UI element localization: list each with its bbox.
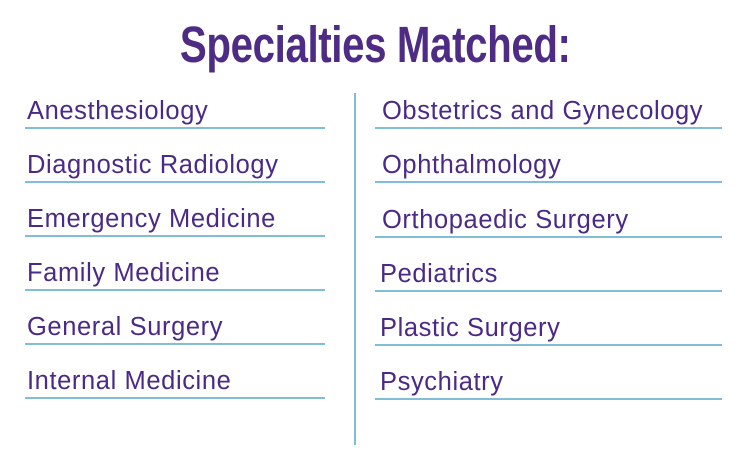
item: Psychiatry xyxy=(375,398,722,400)
panel: right column: Psychiatry xyxy=(380,368,504,396)
item: Pediatrics xyxy=(375,290,722,292)
panel: left column: Family Medicine xyxy=(27,259,220,287)
item: Family Medicine xyxy=(25,289,325,291)
panel: right column: Ophthalmology xyxy=(382,151,561,179)
panel: left column: Emergency Medicine xyxy=(27,205,276,233)
item: Obstetrics and Gynecology xyxy=(375,127,722,129)
column divider xyxy=(354,93,356,445)
panel: right column: Orthopaedic Surgery xyxy=(382,206,629,234)
item: Ophthalmology xyxy=(375,181,722,183)
panel: left column: Anesthesiology xyxy=(27,97,208,125)
item: Diagnostic Radiology xyxy=(25,181,325,183)
panel: right column xyxy=(375,97,722,400)
panel: right column: Obstetrics and Gynecology xyxy=(382,97,703,125)
item: Anesthesiology xyxy=(25,127,325,129)
panel: left column: Internal Medicine xyxy=(27,367,231,395)
panel: right column: Pediatrics xyxy=(380,260,498,288)
panel: left column xyxy=(25,97,325,399)
panel: right column: Plastic Surgery xyxy=(380,314,560,342)
item: General Surgery xyxy=(25,343,325,345)
item: Internal Medicine xyxy=(25,397,325,399)
item: Emergency Medicine xyxy=(25,235,325,237)
item: Orthopaedic Surgery xyxy=(375,236,722,238)
panel: left column: Diagnostic Radiology xyxy=(27,151,279,179)
item: Plastic Surgery xyxy=(375,344,722,346)
panel: left column: General Surgery xyxy=(27,313,223,341)
title: Specialties Matched: xyxy=(180,16,570,73)
